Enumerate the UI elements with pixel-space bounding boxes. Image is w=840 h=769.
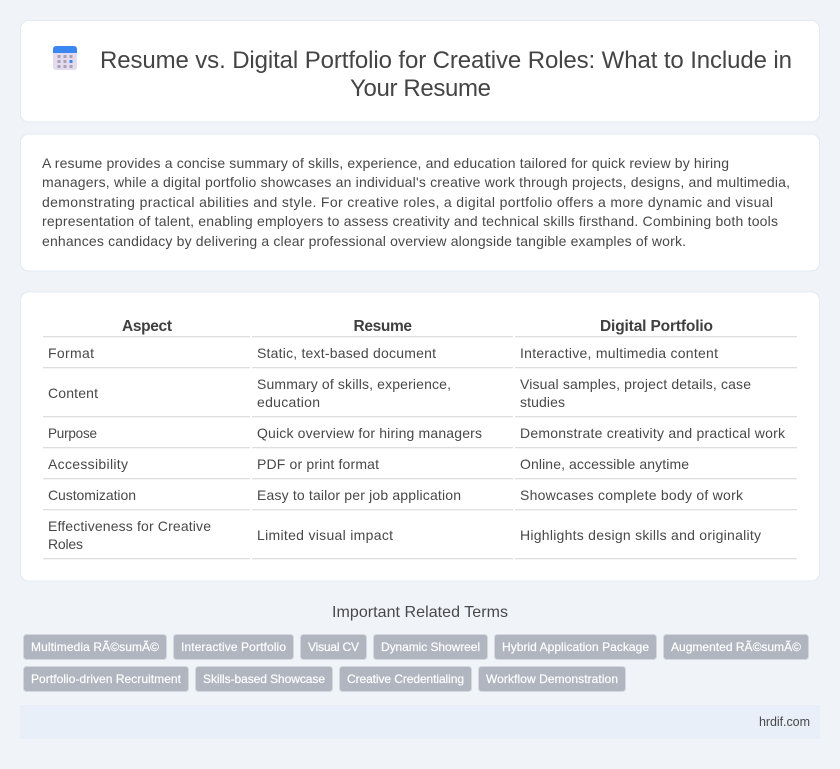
tag list: related terms: Dynamic Showreel <box>381 640 480 654</box>
row: content <box>48 376 751 410</box>
row: customization <box>48 487 744 503</box>
row: purpose: Demonstrate creativity and practical work <box>520 425 786 441</box>
row: effectiveness <box>48 518 761 552</box>
title <box>100 47 792 102</box>
panel: title header <box>20 20 820 122</box>
table header row: Aspect <box>122 318 172 335</box>
text block: summary paragraph <box>42 155 790 249</box>
row: effectiveness: Roles <box>48 536 83 552</box>
tag list: related terms <box>24 634 808 692</box>
row: purpose: Quick overview for hiring managers <box>257 425 482 441</box>
row: format: Static, text-based document <box>257 345 436 361</box>
row: accessibility: Accessibility <box>48 456 128 472</box>
table header row: Digital Portfolio <box>600 318 713 335</box>
row: customization: Easy to tailor per job application <box>257 487 461 503</box>
row: format: Format <box>48 345 94 361</box>
tag list: related terms: Portfolio-driven Recruitment <box>31 672 182 686</box>
row: format <box>48 345 718 361</box>
row: effectiveness: Highlights design skills and originality <box>520 527 761 543</box>
icon: calendar <box>53 46 77 70</box>
row: content: education <box>257 394 320 410</box>
row: content: Visual samples, project details, case <box>520 376 751 392</box>
row: content: Content <box>48 385 98 401</box>
row: accessibility: PDF or print format <box>257 456 379 472</box>
row: customization: Customization <box>48 487 136 503</box>
row: accessibility: Online, accessible anytime <box>520 456 689 472</box>
tag list: related terms: Augmented RÃ©sumÃ© <box>671 640 801 654</box>
row: format: Interactive, multimedia content <box>520 345 718 361</box>
heading: important related terms: Important Related Terms <box>332 604 508 621</box>
panel: introduction <box>20 134 820 271</box>
text block: summary paragraph: demonstrating practical abilities and style. For creative roles, a digital portfolio offers a more dynamic and visual <box>42 194 773 210</box>
row: effectiveness: Effectiveness for Creative <box>48 518 211 534</box>
tag list: related terms: Interactive Portfolio <box>181 640 286 654</box>
row: customization: Showcases complete body of work <box>520 487 744 503</box>
table header row: Resume <box>354 318 412 335</box>
row: accessibility <box>48 456 689 472</box>
text block: summary paragraph: A resume provides a concise summary of skills, experience, and education tailored for quick review by hiring <box>42 155 729 171</box>
text block: summary paragraph: enhances candidacy by delivering a clear professional overview alongside tangible examples of work. <box>42 233 686 249</box>
tag list: related terms: Skills-based Showcase <box>203 672 325 686</box>
footer: hrdif.com <box>759 715 810 729</box>
tag list: related terms: Hybrid Application Package <box>502 640 649 654</box>
panel: comparison table <box>20 292 820 581</box>
text block: summary paragraph: representation of talent, enabling employers to assess creativity and technical skills firsthand. Combining both tools <box>42 213 778 229</box>
tag list: related terms: Workflow Demonstration <box>486 672 618 686</box>
row: purpose: Purpose <box>48 426 97 441</box>
text block: summary paragraph: managers, while a digital portfolio showcases an individual's creative work through projects, designs, and multimedia, <box>42 174 790 190</box>
footer <box>20 705 820 739</box>
row: purpose <box>48 425 786 441</box>
title: Resume vs. Digital Portfolio for Creative Roles: What to Include in <box>100 47 792 74</box>
table header row <box>122 318 713 335</box>
tag list: related terms: Multimedia RÃ©sumÃ© <box>31 640 159 654</box>
title: Your Resume <box>350 75 491 102</box>
row: effectiveness: Limited visual impact <box>257 527 393 543</box>
row: content: studies <box>520 394 565 410</box>
row: content: Summary of skills, experience, <box>257 376 451 392</box>
tag list: related terms: Creative Credentialing <box>347 672 464 686</box>
tag list: related terms: Visual CV <box>308 640 359 654</box>
